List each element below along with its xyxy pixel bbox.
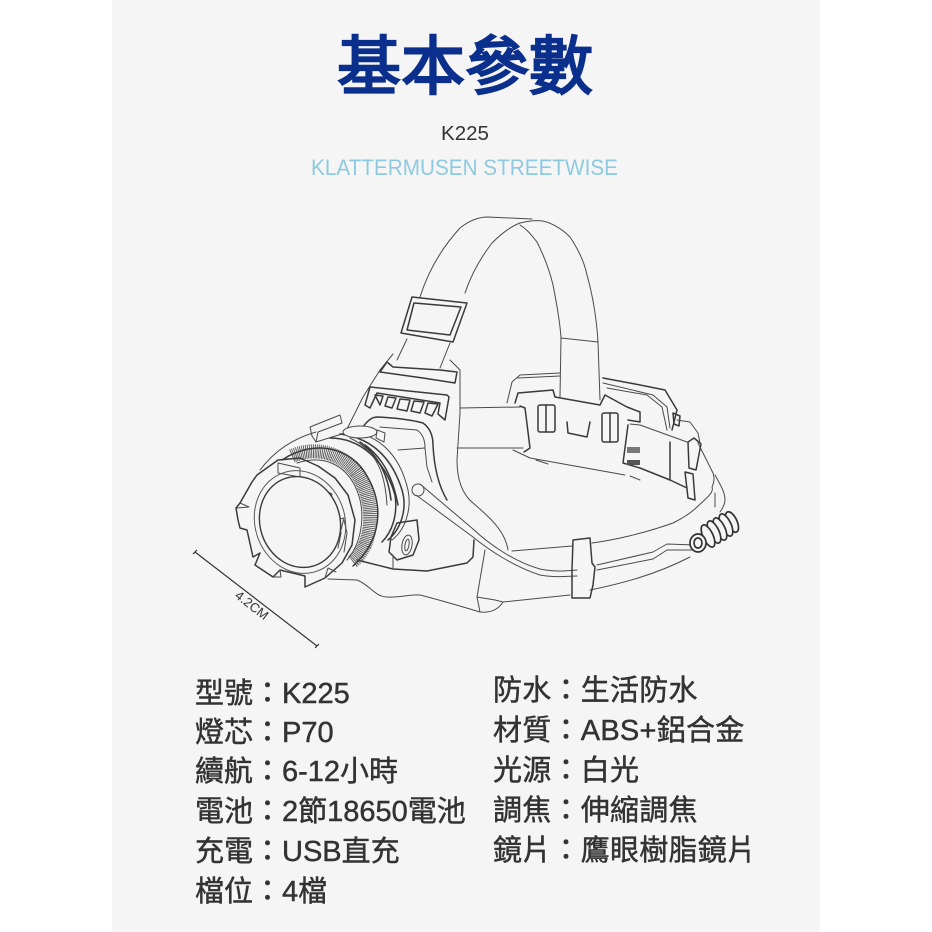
spec list right column: 調焦：伸縮調焦 [493, 794, 698, 827]
front mount plate [345, 354, 508, 550]
headband clip [572, 538, 595, 598]
dimension line [193, 550, 319, 648]
background panel [112, 0, 820, 932]
spec list left column [195, 677, 466, 908]
rear battery box [457, 373, 677, 480]
right side strap and clips [623, 413, 701, 500]
spec list right column: 光源：白光 [493, 754, 639, 787]
coiled cable spring [690, 510, 741, 552]
front gear bezel [236, 458, 355, 587]
lens [241, 459, 359, 585]
title: 基本參數 [337, 31, 593, 103]
knurled focus ring [282, 448, 378, 566]
side flap and shell [260, 415, 345, 470]
lower shell [328, 540, 503, 612]
head strap [397, 217, 600, 400]
spec list right column: 防水：生活防水 [493, 674, 698, 707]
spec list left column: 燈芯：P70 [195, 716, 334, 749]
spec list left column: 電池：2節18650電池 [195, 795, 466, 828]
adjustment knob [389, 520, 419, 560]
dimension line: 4.2CM [232, 588, 272, 623]
power cable [412, 484, 695, 577]
spec list right column [493, 674, 756, 867]
spec list right column: 材質：ABS+鋁合金 [493, 714, 744, 747]
headlamp line drawing [236, 217, 741, 612]
model name: K225 [441, 123, 489, 145]
spec list left column: 型號：K225 [195, 677, 350, 710]
spec list left column: 續航：6-12小時 [195, 755, 398, 788]
battery box slots [538, 405, 618, 442]
rear lens barrel rings [330, 426, 409, 542]
spec list left column: 檔位：4檔 [195, 875, 327, 908]
spec list right column: 鏡片：鷹眼樹脂鏡片 [493, 834, 756, 867]
strap buckle [401, 297, 467, 342]
subtitle: KLATTERMUSEN STREETWISE [311, 155, 618, 180]
spec list left column: 充電：USB直充 [195, 835, 400, 868]
headband [503, 443, 725, 602]
